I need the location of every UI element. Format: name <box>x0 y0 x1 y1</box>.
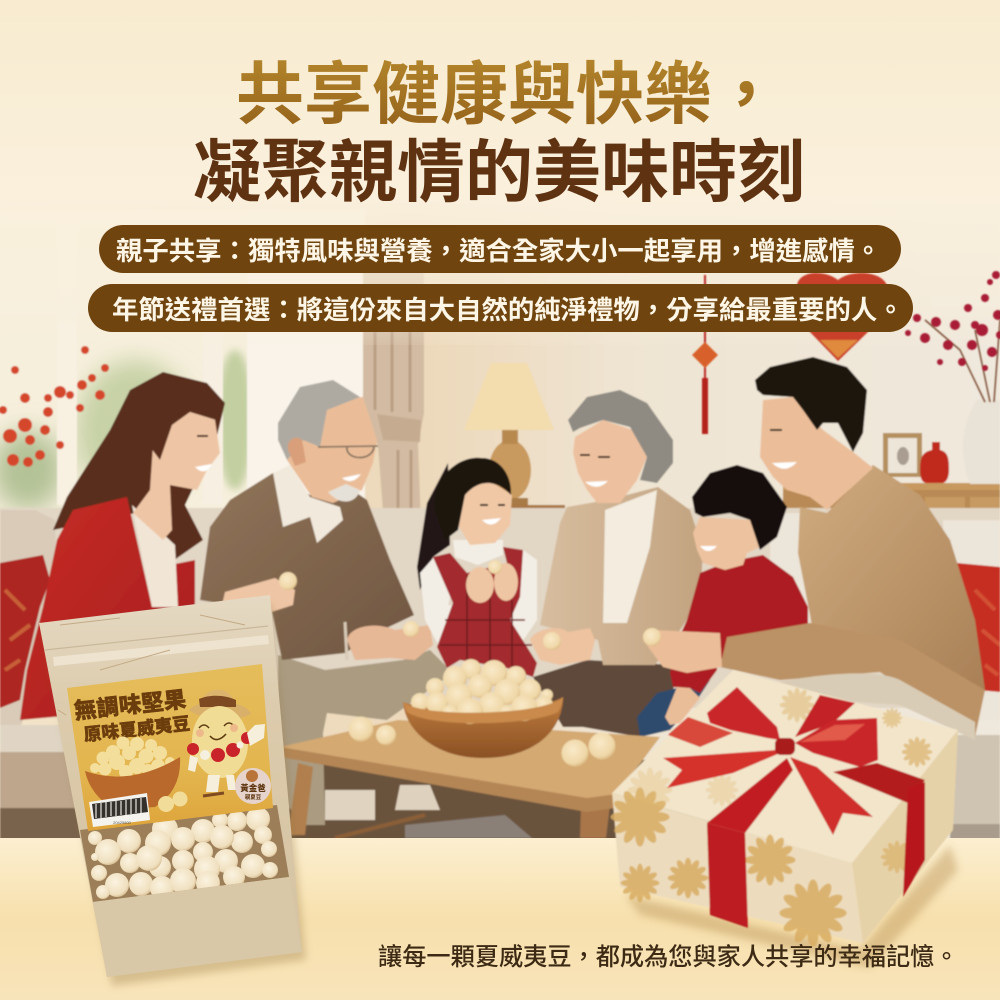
red blossom branch left <box>0 346 109 467</box>
hands <box>466 567 494 603</box>
smile <box>585 481 608 487</box>
person: girl <box>417 458 537 677</box>
gold flower pattern <box>610 688 932 947</box>
face <box>693 517 760 570</box>
red cushion left <box>0 555 50 708</box>
bag window with macadamias <box>80 805 289 902</box>
smile <box>195 464 212 471</box>
person: father <box>755 357 985 690</box>
inner top <box>132 505 178 607</box>
cardigan <box>20 497 195 720</box>
smile <box>482 518 501 525</box>
trousers <box>278 650 447 825</box>
red cushion right <box>957 563 1000 692</box>
wooden bowl of macadamias <box>403 659 563 758</box>
hands and held nuts <box>279 560 661 650</box>
pigtail and hair back <box>417 463 450 590</box>
hair <box>435 458 511 540</box>
person: boy <box>637 465 808 737</box>
bow tails <box>663 750 780 788</box>
top face <box>612 670 958 863</box>
red hanging ornament <box>692 275 718 434</box>
body <box>190 704 250 780</box>
sleeves <box>420 557 485 648</box>
red sweater <box>670 555 808 693</box>
front face <box>612 793 863 943</box>
barcode: 20425800 <box>113 820 132 825</box>
knot <box>775 738 795 755</box>
bag body <box>39 595 302 977</box>
face and neck <box>760 397 873 510</box>
sweater body <box>798 465 985 690</box>
smile <box>342 474 361 481</box>
pill: festive gift <box>88 284 913 332</box>
loose macadamias on table <box>348 716 616 766</box>
face <box>287 397 377 503</box>
red ribbon <box>663 687 925 928</box>
hand and nut <box>222 578 295 615</box>
smile <box>700 546 717 551</box>
pill: family sharing: 親子共享：獨特風味與營養，適合全家大小一起享用，增進感情。 <box>116 236 881 266</box>
hair <box>755 357 867 452</box>
person: mother <box>20 372 295 720</box>
smile <box>772 462 797 469</box>
hair <box>568 390 673 483</box>
ribbon bands <box>707 823 748 928</box>
sweater <box>200 473 414 660</box>
wooden sideboard <box>783 483 1000 525</box>
sofa <box>0 508 1000 840</box>
crimson blossoms above vase <box>905 271 1000 402</box>
jeans <box>637 680 710 737</box>
hat <box>189 701 251 719</box>
bow loops <box>707 687 780 740</box>
inner top <box>603 490 657 623</box>
hair <box>278 380 360 460</box>
gift box <box>610 670 958 968</box>
side face <box>852 730 958 943</box>
headline: 共享健康與快樂， <box>236 57 780 133</box>
coffee table <box>280 720 660 838</box>
headline <box>193 57 805 211</box>
trousers <box>533 660 675 737</box>
mascot <box>187 690 265 796</box>
hands <box>347 625 433 660</box>
red jar <box>920 442 949 483</box>
brand badge: 親夏豆 <box>245 793 262 801</box>
arms <box>247 724 265 746</box>
floor under table <box>290 760 710 840</box>
curtain <box>363 270 424 578</box>
pill: family sharing <box>99 225 901 273</box>
hands <box>530 628 595 665</box>
legs and sandals <box>206 775 236 792</box>
cardigan <box>540 487 703 665</box>
father's arm and hands <box>643 623 985 740</box>
bag bottom panel <box>93 877 302 977</box>
red diamond ornament <box>797 273 887 361</box>
headline: 凝聚親情的美味時刻 <box>193 135 805 211</box>
closing line: 讓每一顆夏威夷豆，都成為您與家人共享的幸福記憶。 <box>378 944 959 971</box>
brand badge <box>235 768 271 804</box>
room scene <box>0 200 1000 840</box>
yellow product label <box>67 664 273 831</box>
hair fringe <box>145 385 222 460</box>
wall <box>0 200 1000 840</box>
hair <box>692 465 787 550</box>
person: grandmother <box>530 390 703 737</box>
barcode <box>89 793 150 827</box>
shadow <box>625 845 958 968</box>
bottom cream band <box>0 838 1000 1000</box>
bag veins and zipper <box>45 615 269 715</box>
label bowl illustration <box>85 736 188 812</box>
picture frame <box>883 433 922 477</box>
label title: 無調味堅果 <box>73 686 188 724</box>
person: grandfather <box>200 380 447 825</box>
turtleneck <box>453 540 503 565</box>
fade of the room into the cream header <box>0 0 1000 345</box>
long hair <box>53 372 225 563</box>
table lamp <box>464 363 565 570</box>
white vase <box>963 400 1000 484</box>
beard <box>328 484 360 502</box>
label title: 原味夏威夷豆 <box>83 712 191 745</box>
face and neck <box>133 398 220 540</box>
flower lei <box>187 732 253 762</box>
label title <box>73 686 191 746</box>
product bag <box>39 595 306 986</box>
brand badge: 黃金爸 <box>240 783 266 793</box>
hand <box>665 687 700 725</box>
glasses <box>318 446 378 458</box>
bag shadow <box>44 604 306 986</box>
sheer curtain <box>247 210 365 520</box>
face <box>199 723 234 728</box>
face <box>455 478 512 545</box>
face <box>573 420 647 503</box>
plaid vest <box>433 547 537 677</box>
window with garden view <box>0 210 253 520</box>
pill: festive gift: 年節送禮首選：將這份來自大自然的純淨禮物，分享給最重要的人。 <box>112 295 904 325</box>
collar <box>273 465 343 543</box>
